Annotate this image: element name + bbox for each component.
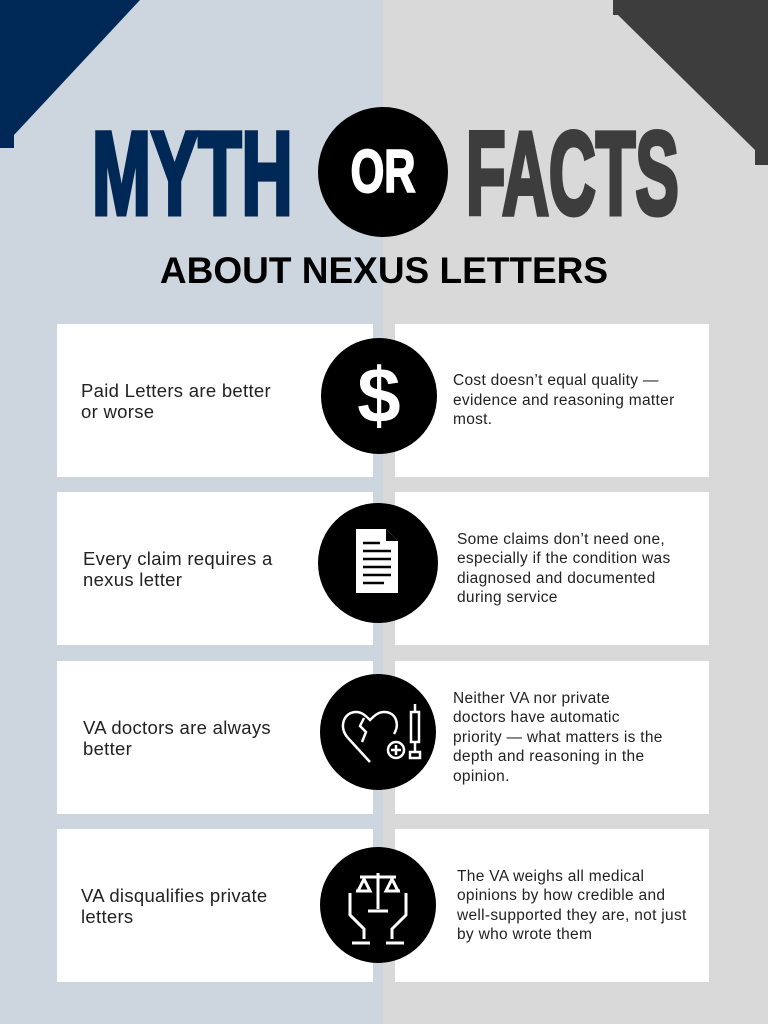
myth 4: [57, 829, 373, 982]
fact 4: by who wrote them: [457, 926, 592, 943]
icon: scales and hands: [320, 847, 436, 963]
fact 2: diagnosed and documented: [457, 570, 656, 586]
fact 2: especially if the condition was: [457, 550, 670, 567]
fact 3: opinion.: [453, 768, 510, 785]
fact 4: The VA weighs all medical: [457, 868, 644, 884]
fact 3: doctors have automatic: [453, 709, 620, 726]
corner triangle: blue: [0, 0, 140, 148]
myth 2: nexus letter: [83, 568, 182, 590]
title: MYTH: MYTH: [92, 108, 293, 240]
fact 1: Cost doesn’t equal quality —: [453, 372, 659, 389]
icon: OR circle: OR: [351, 138, 415, 205]
fact 3: [395, 661, 709, 814]
icon: dollar: [321, 338, 437, 454]
fact 1: evidence and reasoning matter: [453, 392, 675, 409]
fact 2: during service: [457, 589, 558, 606]
myth 3: [57, 661, 373, 814]
myth 3: VA doctors are always: [83, 716, 271, 738]
myth 1: [57, 324, 373, 477]
myth 2: Every claim requires a: [83, 548, 273, 568]
icon: document: [318, 503, 438, 623]
fact 1: [395, 324, 709, 477]
myth 1: or worse: [81, 400, 154, 422]
myth 3: better: [83, 738, 132, 758]
myth 4: VA disqualifies private: [81, 884, 268, 906]
icon: heart and syringe: [320, 674, 436, 790]
corner triangle: gray: [613, 0, 768, 165]
fact 3: Neither VA nor private: [453, 690, 610, 707]
fact 4: [395, 829, 709, 982]
fact 2: [395, 492, 709, 645]
fact 2: Some claims don’t need one,: [457, 530, 665, 548]
title: FACTS: FACTS: [466, 108, 679, 240]
fact 4: well-supported they are, not just: [457, 906, 687, 924]
myth 2: [57, 492, 373, 645]
fact 3: depth and reasoning in the: [453, 748, 644, 765]
icon: OR circle: [318, 107, 448, 237]
fact 4: opinions by how credible and: [457, 887, 665, 904]
fact 1: most.: [453, 411, 492, 428]
myth 1: Paid Letters are better: [81, 380, 271, 400]
fact 3: priority — what matters is the: [453, 729, 663, 746]
subtitle: ABOUT NEXUS LETTERS: [160, 250, 608, 291]
icon: dollar: $: [357, 351, 401, 439]
myth 4: letters: [81, 906, 133, 926]
